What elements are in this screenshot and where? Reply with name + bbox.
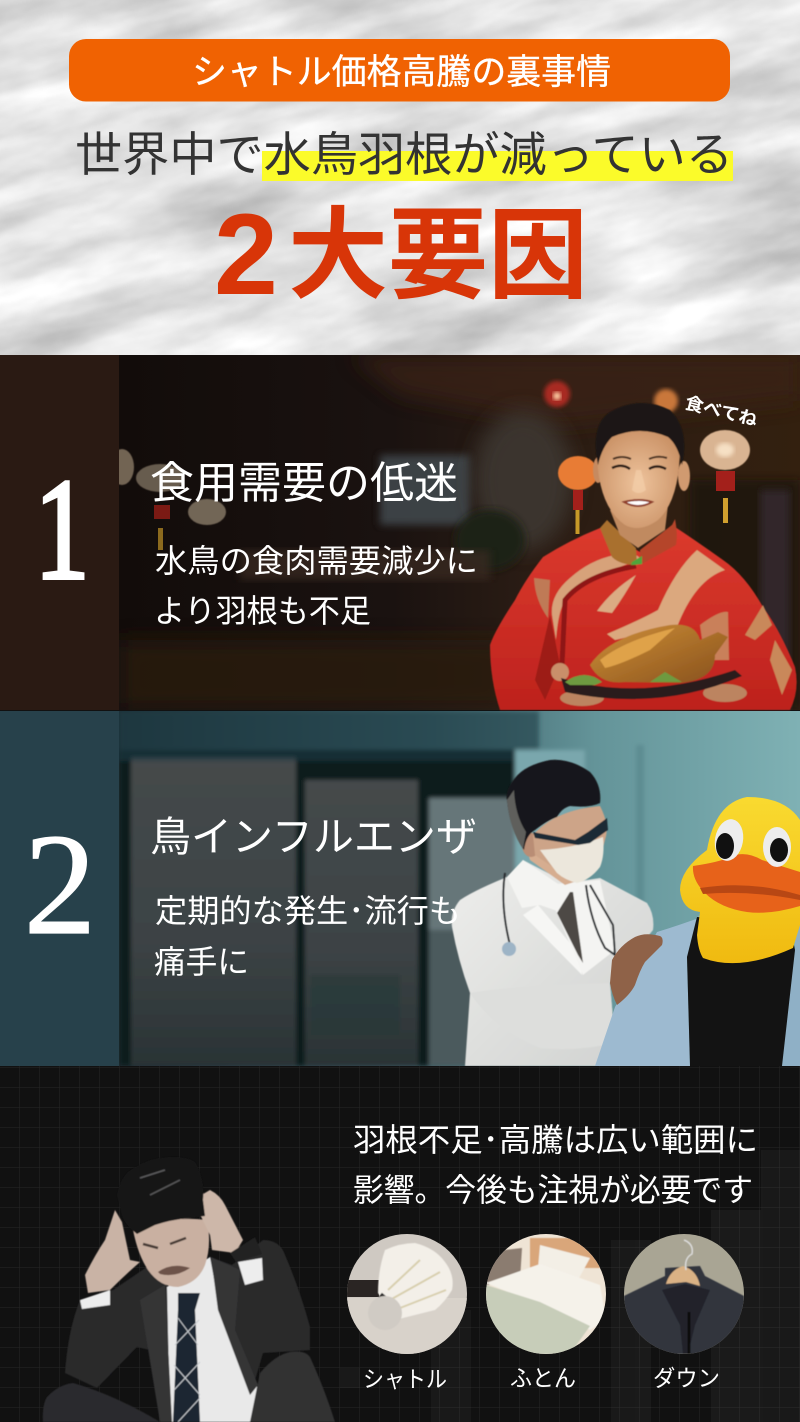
mask [540, 837, 604, 883]
lantern right [700, 430, 750, 523]
label: シャトル: シャトル [363, 1366, 447, 1392]
hands [551, 663, 569, 681]
message text: 影響。今後も注視が必要です [353, 1172, 753, 1208]
denim shirt [595, 915, 707, 1066]
plate [561, 670, 742, 699]
body text 1: より羽根も不足 [154, 593, 371, 629]
panel: fur header background [0, 0, 800, 355]
label: ふとん: ふとん [510, 1365, 576, 1391]
body text 1: 水鳥の食肉需要減少に [155, 543, 478, 579]
lantern left [558, 456, 598, 534]
body text 2 [154, 893, 461, 980]
panel: cause 1 [0, 355, 800, 710]
face [133, 1219, 209, 1287]
duck beak [693, 854, 800, 913]
watch [230, 1238, 258, 1262]
duck head [680, 797, 800, 963]
main title: 2大要因: 大要因 [288, 200, 588, 312]
white coat [452, 860, 653, 1066]
eyes, mouth [612, 466, 666, 469]
chef with roast duck [490, 403, 797, 710]
duck-headed patient [595, 797, 800, 1066]
icon: futon photo [486, 1234, 606, 1354]
number strip 1 [0, 355, 119, 710]
black shirt [687, 917, 795, 1066]
icon: shuttlecock photo [347, 1234, 467, 1358]
duck eyes [714, 819, 744, 861]
title line: 世界中で水鳥羽根が減っている [75, 128, 733, 181]
heading: 食用需要の低迷: 食用需要の低迷 [150, 459, 458, 508]
hospital background photo [119, 711, 800, 1066]
right hand [200, 1190, 244, 1254]
stethoscope [503, 873, 615, 955]
tie [173, 1293, 200, 1422]
body text 1 [154, 543, 478, 629]
message text: 羽根不足･高騰は広い範囲に [353, 1122, 758, 1158]
hair [596, 403, 684, 465]
tie [557, 892, 583, 963]
robe [490, 525, 797, 710]
panel: cause 2 [0, 711, 800, 1066]
worried businessman [43, 1157, 335, 1422]
number strip 1: 1 [34, 449, 90, 610]
label: ダウン: ダウン [653, 1365, 720, 1391]
main title: 2大要因: 2 [214, 191, 278, 319]
knee [250, 1352, 335, 1422]
shirt [167, 1257, 257, 1422]
hair [507, 760, 600, 850]
doctor hand [610, 934, 663, 1005]
message text [353, 1122, 758, 1208]
heading pill [69, 39, 730, 102]
cuffs [80, 1258, 263, 1309]
lapels [140, 1285, 172, 1422]
heading: 鳥インフルエンザ: 鳥インフルエンザ [150, 814, 477, 860]
doctor [452, 760, 653, 1066]
neck and ear [527, 850, 580, 885]
suit [65, 1240, 310, 1388]
heading pill: シャトル価格高騰の裏事情 [192, 53, 611, 92]
number strip 2: 2 [24, 805, 96, 965]
body text 2: 定期的な発生･流行も [155, 893, 461, 929]
face [533, 806, 607, 872]
icon: down jacket photo [624, 1234, 744, 1354]
neck and face [610, 505, 668, 548]
collar [600, 520, 637, 565]
roast duck [590, 625, 728, 683]
glasses [533, 818, 608, 845]
left hand [85, 1210, 140, 1293]
restaurant background photo [110, 355, 800, 710]
panel: impact [0, 1066, 800, 1422]
legs [43, 1383, 160, 1422]
body text 2: 痛手に [154, 944, 249, 980]
hair [117, 1157, 205, 1234]
number strip 2 [0, 711, 119, 1066]
handwritten speech: 食べてね: 食べてね [683, 393, 760, 430]
